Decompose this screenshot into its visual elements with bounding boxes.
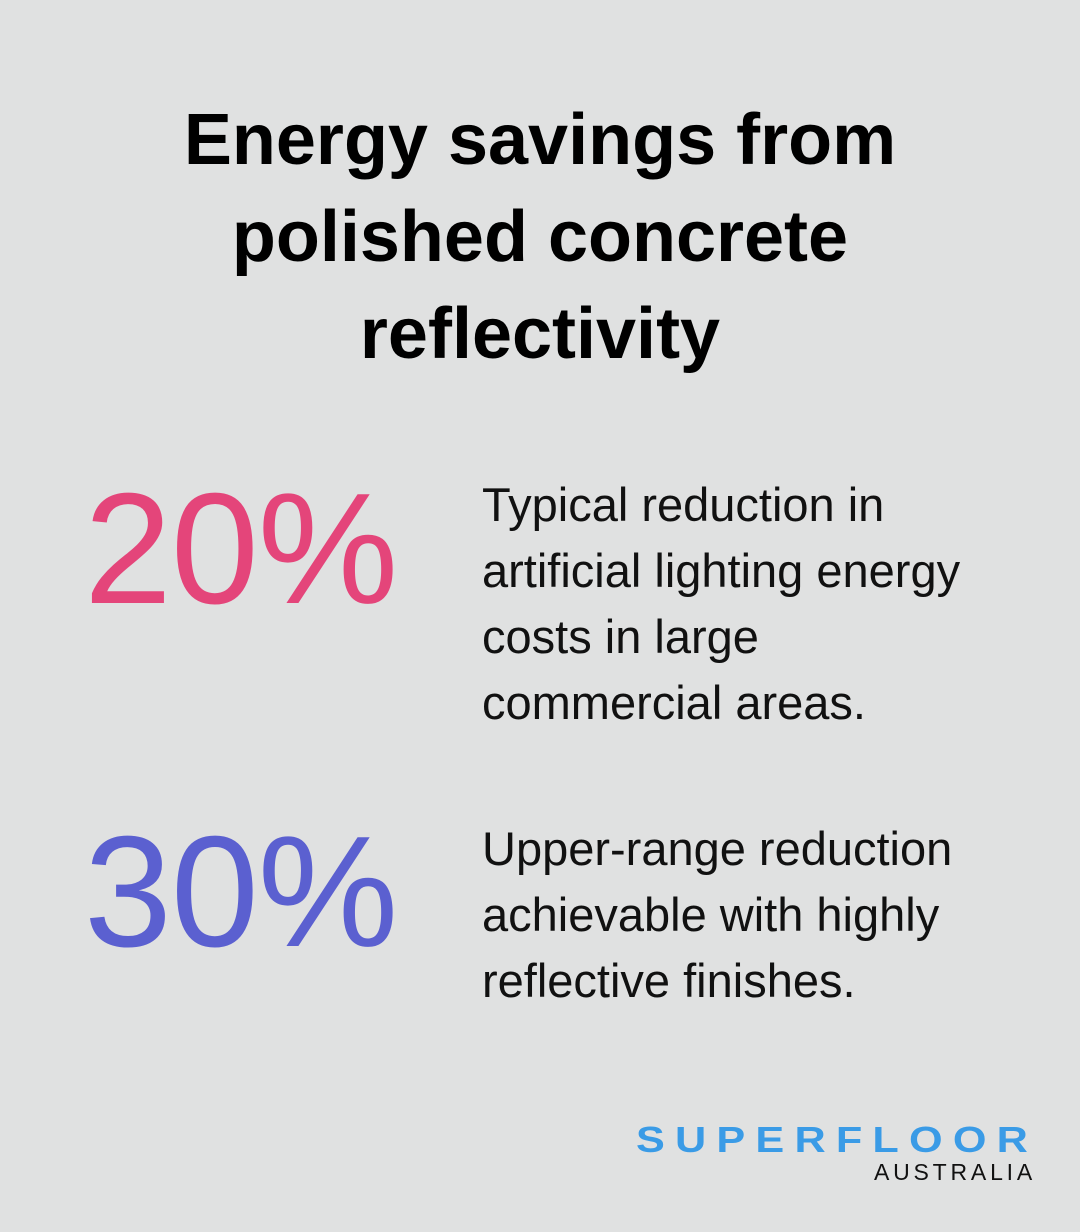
description: 30%: achievable with highly: [482, 888, 939, 941]
description: 30%: Upper-range reduction: [482, 822, 952, 875]
title: reflectivity: [360, 294, 720, 374]
description: 30%: [482, 822, 952, 1007]
description: 20%: artificial lighting energy: [482, 544, 960, 597]
description: 20%: costs in large: [482, 610, 759, 663]
title: polished concrete: [232, 197, 848, 277]
title: [184, 100, 896, 374]
description: 20%: commercial areas.: [482, 676, 866, 729]
logo: AUSTRALIA: [874, 1159, 1036, 1185]
stat: 20%: 20%: [84, 461, 397, 637]
description: 20%: Typical reduction in: [482, 478, 884, 531]
description: 30%: reflective finishes.: [482, 954, 856, 1007]
description: 20%: [482, 478, 960, 729]
title: Energy savings from: [184, 100, 896, 180]
logo: SUPERFLOOR: [636, 1119, 1038, 1160]
stat: 30%: 30%: [84, 804, 397, 980]
logo: [636, 1119, 1038, 1185]
